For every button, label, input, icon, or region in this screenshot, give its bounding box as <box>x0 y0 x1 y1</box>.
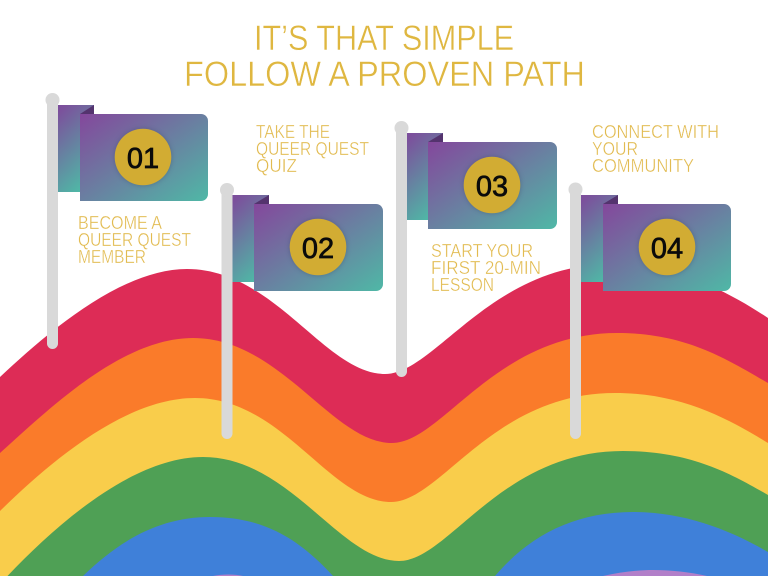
step 1 text <box>78 213 191 267</box>
flag 3 fold <box>428 133 443 142</box>
number badge 03: 03 <box>476 171 508 203</box>
pole 3 <box>394 121 408 377</box>
flag 2 back <box>232 195 269 282</box>
flag 1 front <box>80 114 208 201</box>
step 1 text: QUEER QUEST <box>78 230 191 250</box>
number badge 04 <box>638 218 696 276</box>
pole 1 <box>46 93 60 349</box>
number badge 01: 01 <box>127 143 159 175</box>
step 3 text: START YOUR <box>431 241 533 261</box>
number badge 01 <box>114 128 172 186</box>
number badge 02: 02 <box>302 233 334 265</box>
step 1 text: BECOME A <box>78 213 162 233</box>
flag 1 back <box>57 105 94 192</box>
pole 2 <box>220 183 234 439</box>
step 3 text: FIRST 20-MIN <box>431 258 541 278</box>
step 2 text: QUEER QUEST <box>256 139 369 159</box>
step 3 text <box>431 241 541 295</box>
number badge 04: 04 <box>651 233 683 265</box>
flag 3 front <box>428 142 557 229</box>
step 4 text: YOUR <box>592 139 638 159</box>
step 2 text: QUIZ <box>256 156 297 176</box>
flag 4 front <box>603 204 731 291</box>
rainbow path <box>0 264 768 576</box>
step 4 text: CONNECT WITH <box>592 122 719 142</box>
step 3 flag <box>394 121 557 377</box>
step 3 text: LESSON <box>431 275 494 295</box>
flag 4 fold <box>603 195 618 204</box>
step 2 text: TAKE THE <box>256 122 330 142</box>
step 4 text: COMMUNITY <box>592 156 694 176</box>
flag 1 fold <box>80 105 94 114</box>
step 4 text <box>592 122 719 176</box>
flag 4 back <box>580 195 618 282</box>
flag 2 fold <box>254 195 269 204</box>
step 2 text <box>256 122 369 176</box>
flag 2 front <box>254 204 383 291</box>
step 2 flag <box>220 183 383 439</box>
step 1 text: MEMBER <box>78 247 146 267</box>
title: IT’S THAT SIMPLE <box>254 19 514 58</box>
number badge 02 <box>289 218 347 276</box>
flag 3 back <box>406 133 443 220</box>
pole 4 <box>568 182 582 439</box>
step 4 flag <box>568 182 731 439</box>
step 1 flag <box>46 93 208 349</box>
title <box>184 19 585 94</box>
number badge 03 <box>463 156 521 214</box>
title: FOLLOW A PROVEN PATH <box>184 55 585 94</box>
